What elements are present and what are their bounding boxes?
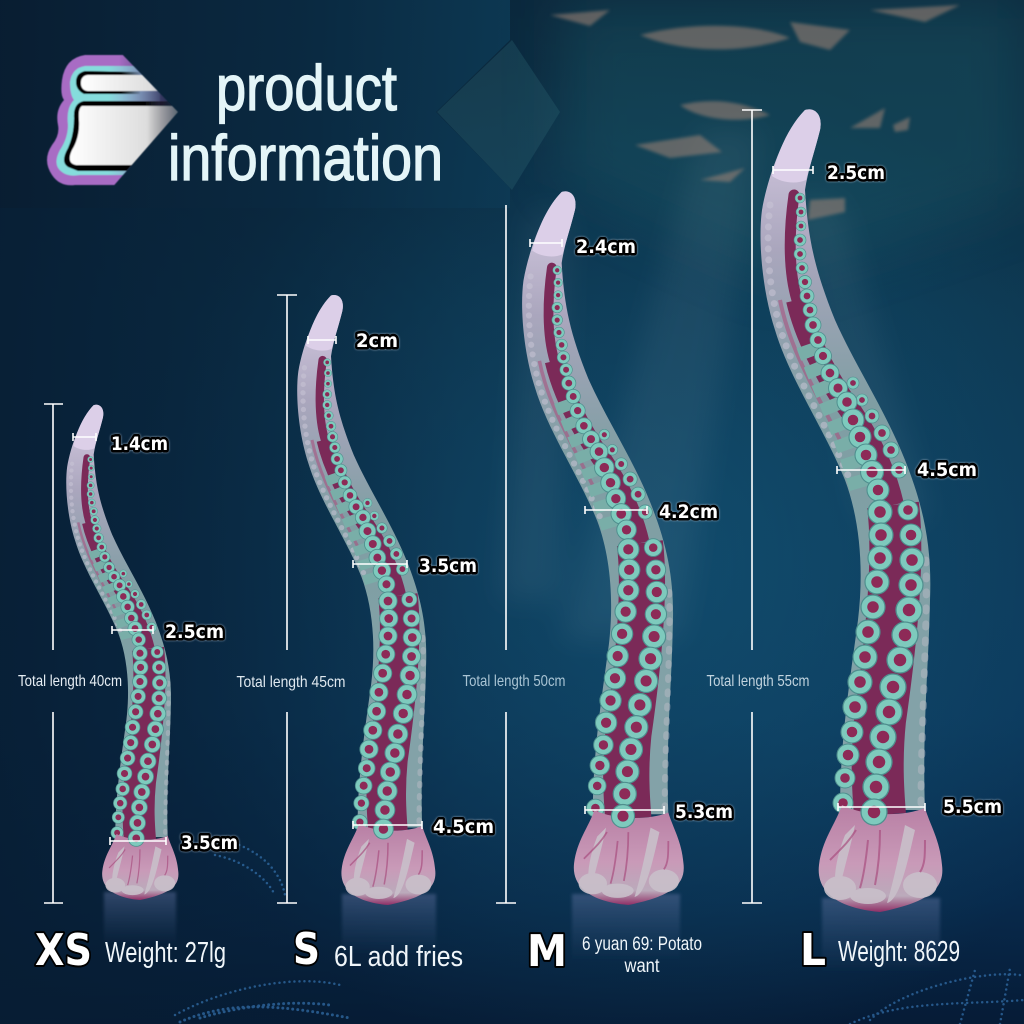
width labels L: 4.5cm [917,459,977,481]
total length bracket M [496,205,516,903]
width labels M: 5.3cm [675,801,733,823]
width labels S: 4.5cm [433,816,494,838]
size letter S: S [293,924,320,975]
width labels M: 2.4cm [576,236,636,258]
tentacle figure S [297,295,435,905]
width labels M: 4.2cm [659,501,718,523]
width markers S [308,336,422,829]
reflection M [572,894,680,962]
size letter XS: XS [35,925,92,976]
total length bracket S [277,295,297,903]
panel: size S [236,295,494,975]
width labels S: 2cm [356,330,398,352]
reflection S [342,894,436,956]
tentacle figure M [522,191,684,905]
width labels XS: 1.4cm [111,433,168,455]
title: product [216,52,397,124]
total length label S: Total length 45cm [236,674,346,691]
reflection L [822,898,940,974]
note M: want [624,956,660,977]
width labels L [827,162,1002,818]
total length bracket XS [44,404,63,903]
total length label M: Total length 50cm [462,673,566,690]
header band [0,0,560,208]
total length bracket L [742,110,762,903]
title: information [168,122,443,194]
width markers M [530,239,664,814]
width labels S: 3.5cm [419,555,477,577]
note M: 6 yuan 69: Potato [582,934,702,955]
tentacle figure XS [66,405,178,900]
note S: 6L add fries [334,941,463,973]
width markers L [773,166,925,811]
width labels XS: 3.5cm [181,832,238,854]
width labels L: 5.5cm [943,796,1002,818]
tentacle figure L [761,109,942,912]
width labels XS: 2.5cm [165,621,224,643]
total length label XS: Total length 40cm [18,673,122,690]
width labels XS [111,433,238,854]
panel: size M [462,191,733,977]
icon: layered banner logo [47,55,181,185]
width markers XS [73,433,166,845]
width labels L: 2.5cm [827,162,885,184]
title [168,52,443,194]
size letter L: L [800,925,826,976]
panel: size XS [18,404,238,976]
size letter M: M [527,926,567,977]
weight note L: Weight: 8629 [838,936,960,968]
note M [582,934,702,977]
reflection XS [104,892,176,946]
total length label L: Total length 55cm [706,673,810,690]
weight note XS: Weight: 27lg [105,937,226,969]
panel: size L [706,109,1002,976]
width labels M [576,236,733,823]
width labels S [356,330,494,838]
